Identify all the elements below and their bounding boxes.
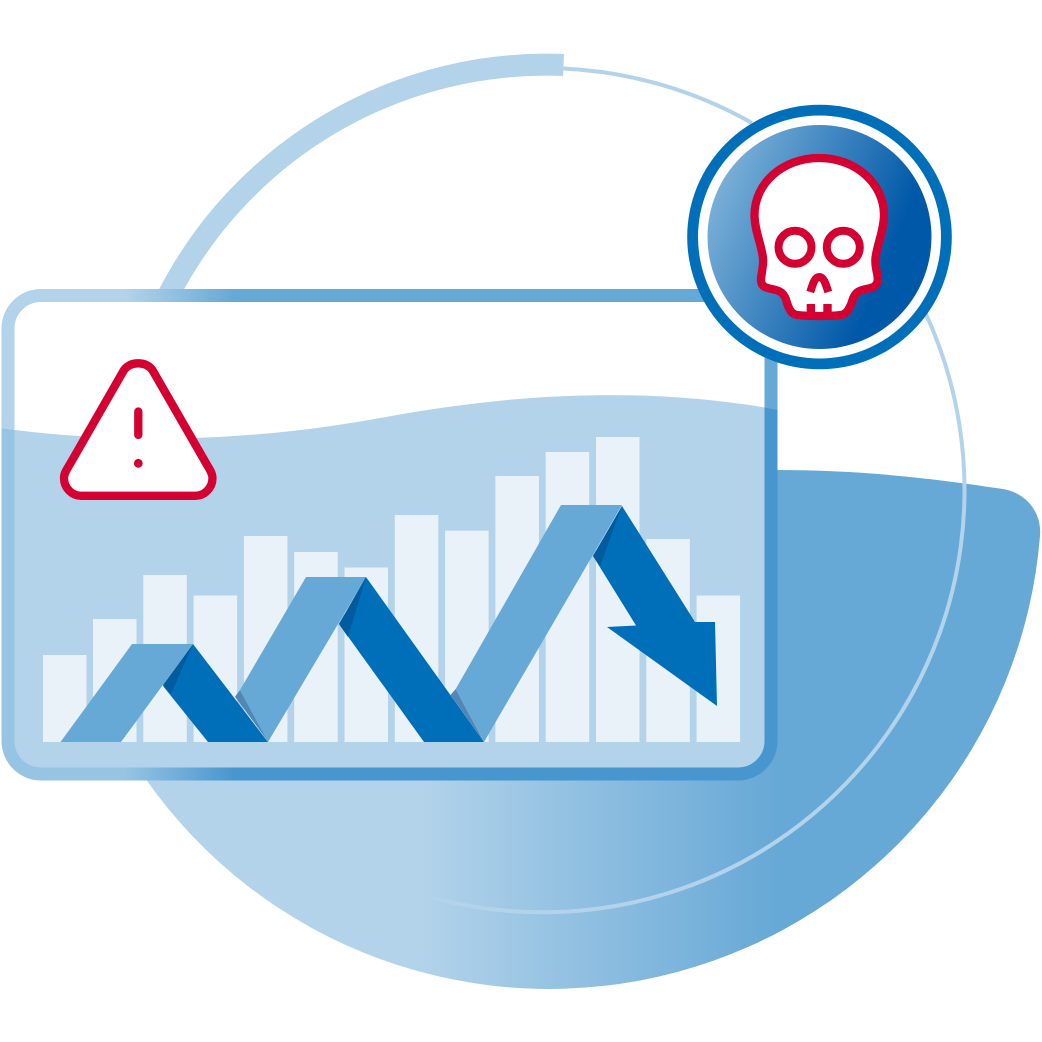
light segment 2 (240, 577, 366, 742)
zigzag ribbon arrow (60, 505, 717, 742)
badge disc (708, 125, 932, 349)
light segment 1 (60, 644, 193, 742)
fold shade 3 (339, 577, 366, 637)
badge ring (687, 105, 952, 369)
skull nose (810, 277, 828, 292)
panel frame lower (2, 408, 778, 780)
dark segment 2 (339, 577, 484, 742)
light segment 3 (456, 505, 622, 742)
icon: skull badge (687, 105, 952, 369)
skull outline (754, 158, 884, 316)
bar chart (43, 437, 740, 742)
panel wave fill (8, 395, 770, 768)
fold shade 2 (235, 690, 268, 742)
fold shade 4 (450, 689, 484, 742)
icon: warning triangle (64, 363, 212, 496)
dark arrowhead segment (593, 506, 717, 706)
thick ring arc (168, 65, 564, 296)
skull teeth (807, 304, 832, 314)
panel background (8, 296, 771, 774)
fold shade 5 (593, 506, 622, 566)
background blob (145, 470, 1040, 989)
skull eyes (778, 231, 812, 264)
dark segment 1 (163, 644, 268, 742)
exclamation mark (134, 412, 142, 435)
chart panel (8, 296, 771, 774)
panel frame upper (2, 289, 778, 430)
thin ring (430, 68, 965, 912)
fold shade 1 (163, 644, 193, 694)
